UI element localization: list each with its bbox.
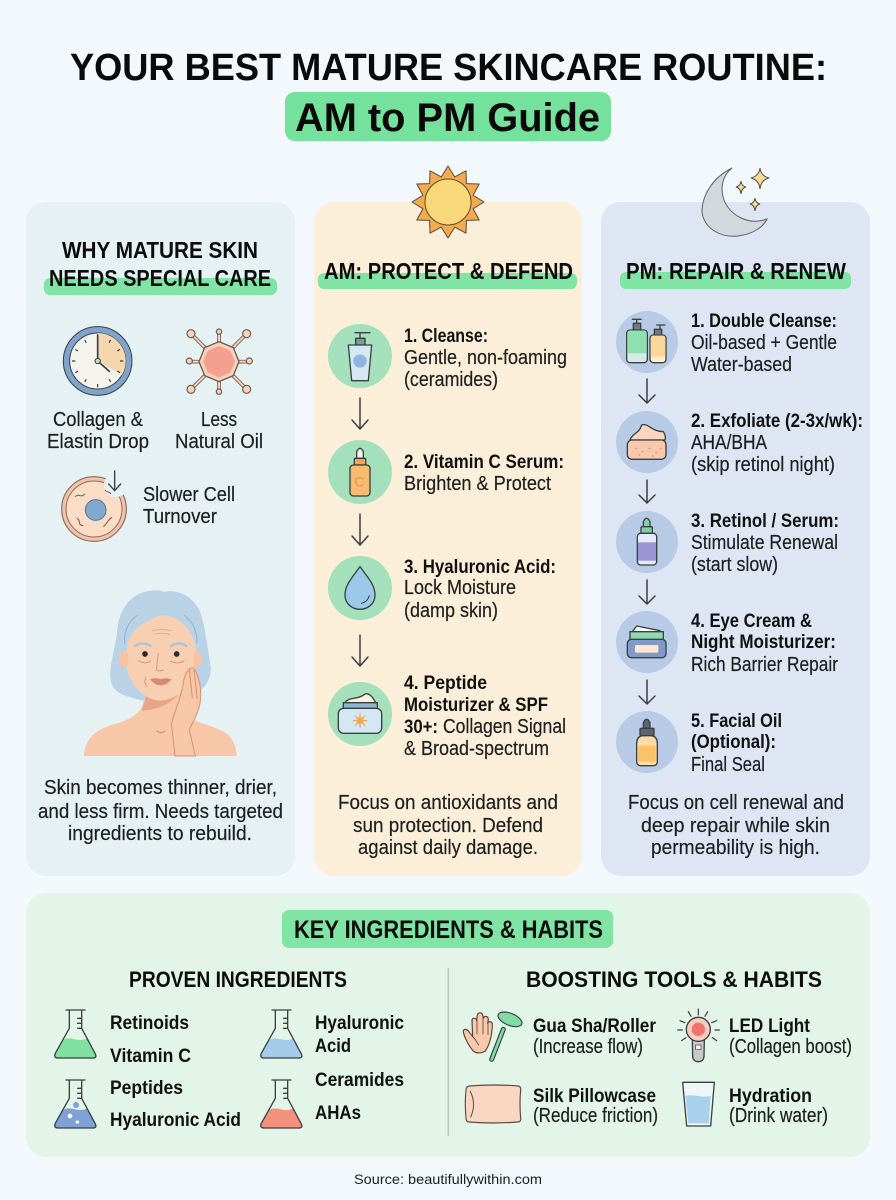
icon: sun (412, 166, 484, 238)
panel: why mature skin needs special care (26, 202, 295, 876)
title: YOUR BEST MATURE SKINCARE ROUTINE: (70, 47, 827, 89)
step 1: cleanse: Gentle, non-foaming (404, 347, 567, 369)
panel heading: WHY MATURE SKIN (62, 237, 258, 263)
proven ingredients column (55, 967, 404, 1131)
step 4: peptide moisturizer and SPF: Moisturizer & SPF (404, 694, 548, 716)
step 5: facial oil: Final Seal (691, 754, 765, 776)
title (70, 47, 827, 141)
icon: moon and stars (702, 168, 769, 236)
panel: PM repair and renew (601, 168, 870, 876)
icon: indigo flask (55, 1080, 96, 1128)
ingredient names: Retinoids (110, 1012, 189, 1034)
step 4: peptide moisturizer and SPF: & Broad-spectrum (404, 738, 549, 760)
icon: blue flask (261, 1010, 302, 1058)
panel description: permeability is high. (651, 837, 820, 859)
habit names (533, 1015, 852, 1127)
arrow (639, 680, 655, 704)
arrow (639, 379, 655, 403)
panel: key ingredients and habits (26, 893, 870, 1157)
step 3: retinol serum: Stimulate Renewal (691, 532, 838, 554)
step 2: exfoliate: AHA/BHA (691, 432, 768, 454)
panel description (38, 777, 283, 845)
step 4: eye cream and night moisturizer: Rich Barrier Repair (691, 654, 838, 676)
step 1: double cleanse: 1. Double Cleanse: (691, 310, 837, 332)
step 1: double cleanse: Oil-based + Gentle (691, 332, 837, 354)
step 2: vitamin C serum: Brighten & Protect (404, 473, 551, 495)
arrow (639, 580, 655, 604)
step 4: eye cream and night moisturizer (616, 610, 838, 676)
habit names: Gua Sha/Roller (533, 1015, 656, 1037)
step 3: hyaluronic acid: 3. Hyaluronic Acid: (404, 556, 556, 578)
step 2: vitamin C serum: C (354, 474, 364, 490)
step 4: peptide moisturizer and SPF (328, 672, 566, 760)
step 2: vitamin C serum: 2. Vitamin C Serum: (404, 451, 564, 473)
step 4: peptide moisturizer and SPF: Collagen Signal (443, 716, 566, 738)
proven ingredients column: PROVEN INGREDIENTS (129, 967, 347, 992)
step 2: exfoliate: 2. Exfoliate (2-3x/wk): (691, 410, 863, 432)
ingredient names: AHAs (315, 1102, 361, 1124)
step 1: cleanse: 1. Cleanse: (404, 325, 488, 347)
panel heading (282, 910, 613, 948)
panel heading: AM: PROTECT & DEFEND (324, 258, 573, 284)
step 5: facial oil: 5. Facial Oil (691, 710, 782, 732)
panel description: ingredients to rebuild. (68, 823, 252, 845)
step 4: eye cream and night moisturizer: 4. Eye Cream & (691, 610, 812, 632)
habit names: (Reduce friction) (533, 1105, 658, 1127)
causes text: Slower Cell (143, 484, 235, 506)
arrow (352, 398, 368, 429)
boosting tools and habits column: BOOSTING TOOLS & HABITS (526, 967, 822, 992)
causes text: Natural Oil (175, 431, 263, 453)
causes text: Turnover (143, 506, 217, 528)
icon: coral flask (261, 1080, 302, 1128)
step 4: peptide moisturizer and SPF: 30+: (404, 716, 438, 738)
causes text: Collagen & (53, 409, 144, 431)
ingredient names: Hyaluronic Acid (110, 1109, 241, 1131)
habit names: (Collagen boost) (729, 1036, 852, 1058)
habit names: Silk Pillowcase (533, 1085, 656, 1107)
step 5: facial oil (616, 710, 782, 776)
boosting tools and habits column (463, 967, 852, 1127)
panel description: sun protection. Defend (353, 815, 543, 837)
ingredient names: Vitamin C (110, 1045, 191, 1067)
habit names: Hydration (729, 1085, 812, 1107)
step 2: exfoliate (616, 410, 863, 476)
panel heading: NEEDS SPECIAL CARE (49, 265, 271, 291)
step 3: hyaluronic acid: (damp skin) (404, 600, 498, 622)
source line: Source: beautifullywithin.com (354, 1171, 542, 1187)
ingredient names: Peptides (110, 1077, 183, 1099)
title: AM to PM Guide (295, 96, 600, 140)
icon: LED light (678, 1009, 719, 1062)
step 1: cleanse (328, 324, 567, 391)
panel description (338, 792, 558, 859)
illustration: mature woman touching her cheek (84, 590, 237, 756)
icon: clock (63, 327, 132, 395)
ingredient names: Ceramides (315, 1069, 404, 1091)
step 4: peptide moisturizer and SPF: 4. Peptide (404, 672, 487, 694)
panel heading (44, 237, 277, 295)
habit names: LED Light (729, 1015, 810, 1037)
step 4: eye cream and night moisturizer: Night Moisturizer: (691, 631, 836, 653)
panel description: Focus on antioxidants and (338, 792, 558, 814)
icon: hand and roller (463, 1009, 524, 1059)
arrow (352, 514, 368, 545)
panel description (628, 792, 844, 859)
ingredient names: Acid (315, 1035, 351, 1057)
step 3: hyaluronic acid (328, 556, 556, 622)
step 1: double cleanse (616, 310, 837, 376)
causes text: Less (201, 409, 237, 431)
panel description: deep repair while skin (641, 815, 830, 837)
habit names: (Drink water) (729, 1105, 828, 1127)
ingredient names: Hyaluronic (315, 1012, 404, 1034)
panel description: against daily damage. (358, 837, 538, 859)
icon: silk pillow (465, 1085, 521, 1123)
icon: water glass (683, 1082, 714, 1126)
step 2: exfoliate: (skip retinol night) (691, 454, 835, 476)
panel description: Focus on cell renewal and (628, 792, 844, 814)
step 3: retinol serum: (start slow) (691, 554, 778, 576)
panel description: and less firm. Needs targeted (38, 801, 283, 823)
panel heading: PM: REPAIR & RENEW (626, 258, 846, 284)
panel description: Skin becomes thinner, drier, (44, 777, 277, 799)
step 2: vitamin C serum (328, 440, 564, 504)
step 3: hyaluronic acid: Lock Moisture (404, 577, 516, 599)
icon: green flask (55, 1010, 96, 1058)
step 3: retinol serum: 3. Retinol / Serum: (691, 510, 839, 532)
icon: oil cell (186, 329, 252, 394)
panel: AM protect and defend (314, 166, 582, 876)
causes text: Elastin Drop (47, 431, 149, 453)
panel heading: KEY INGREDIENTS & HABITS (294, 916, 603, 944)
step 3: retinol serum (616, 510, 839, 576)
icon: slow cell (62, 471, 128, 541)
step 1: double cleanse: Water-based (691, 354, 792, 376)
arrow (639, 480, 655, 503)
ingredient names (110, 1012, 404, 1131)
causes text (47, 409, 263, 528)
step 5: facial oil: (Optional): (691, 731, 776, 753)
step 1: cleanse: (ceramides) (404, 369, 498, 391)
arrow (352, 635, 368, 666)
habit names: (Increase flow) (533, 1036, 643, 1058)
